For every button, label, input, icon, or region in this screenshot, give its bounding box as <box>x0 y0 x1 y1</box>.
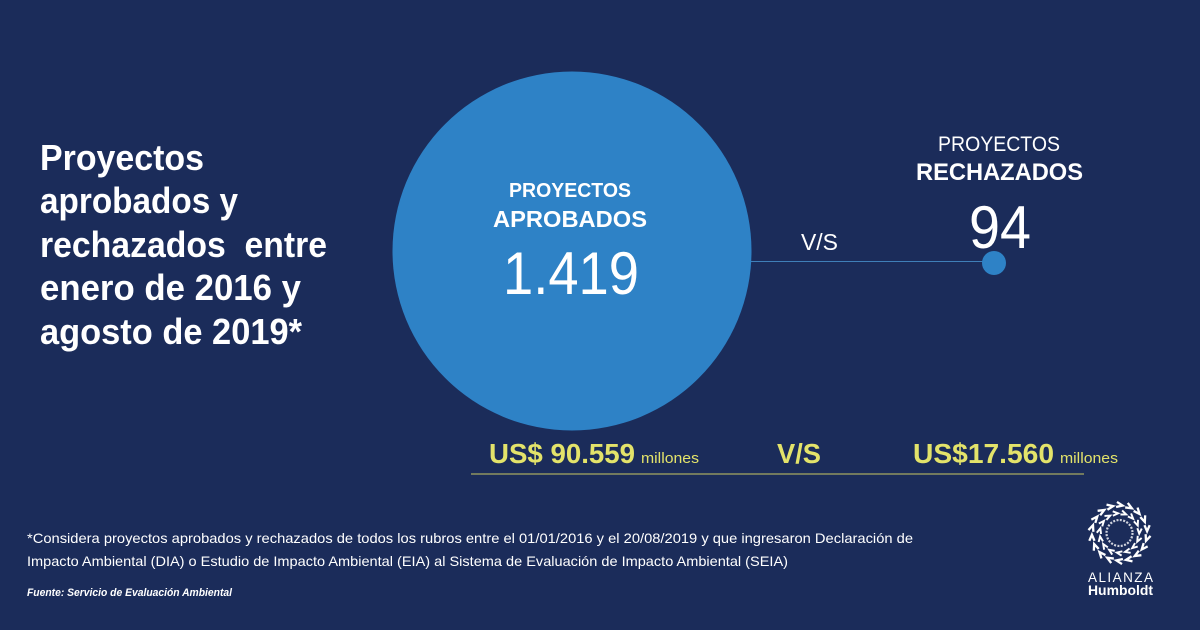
investment comparison: US$17.560 <box>913 438 1054 469</box>
investment comparison: US$ 90.559 <box>489 438 635 469</box>
investment comparison: V/S <box>777 438 821 469</box>
rechazados label: RECHAZADOS <box>916 159 1083 186</box>
footnote: Impacto Ambiental (DIA) o Estudio de Impacto Ambiental (EIA) al Sistema de Evaluación de Impacto Ambiental (SEIA) <box>27 553 788 569</box>
dot: proyectos rechazados <box>982 251 1006 275</box>
logo: Alianza Humboldt: Humboldt <box>1088 582 1153 598</box>
title: rechazados entre <box>40 224 327 265</box>
investment comparison: millones <box>1060 450 1118 467</box>
footnote: *Considera proyectos aprobados y rechazados de todos los rubros entre el 01/01/2016 y el 20/08/2019 y que ingresaron Declaración de <box>27 530 913 546</box>
title: enero de 2016 y <box>40 267 301 308</box>
title: aprobados y <box>40 180 238 221</box>
investment comparison <box>471 438 1118 474</box>
rechazados label: 94 <box>969 194 1031 261</box>
circle: proyectos aprobados: 1.419 <box>503 240 639 307</box>
title: Proyectos <box>40 137 204 178</box>
title <box>40 137 327 352</box>
source: Fuente: Servicio de Evaluación Ambiental <box>27 587 233 599</box>
rechazados label <box>916 133 1083 261</box>
logo: Alianza Humboldt <box>1088 502 1153 598</box>
title: agosto de 2019* <box>40 311 302 352</box>
connector line <box>750 260 985 262</box>
circle: proyectos aprobados: APROBADOS <box>493 206 647 232</box>
rechazados label: PROYECTOS <box>938 133 1060 156</box>
label: V/S: V/S <box>801 229 838 255</box>
circle: proyectos aprobados <box>392 72 752 430</box>
icon: spiral ring of chevrons <box>1088 502 1151 564</box>
circle: proyectos aprobados: PROYECTOS <box>509 180 631 202</box>
logo: Alianza Humboldt: ALIANZA <box>1088 570 1153 585</box>
footnote <box>27 530 913 569</box>
investment comparison: millones <box>641 450 699 467</box>
